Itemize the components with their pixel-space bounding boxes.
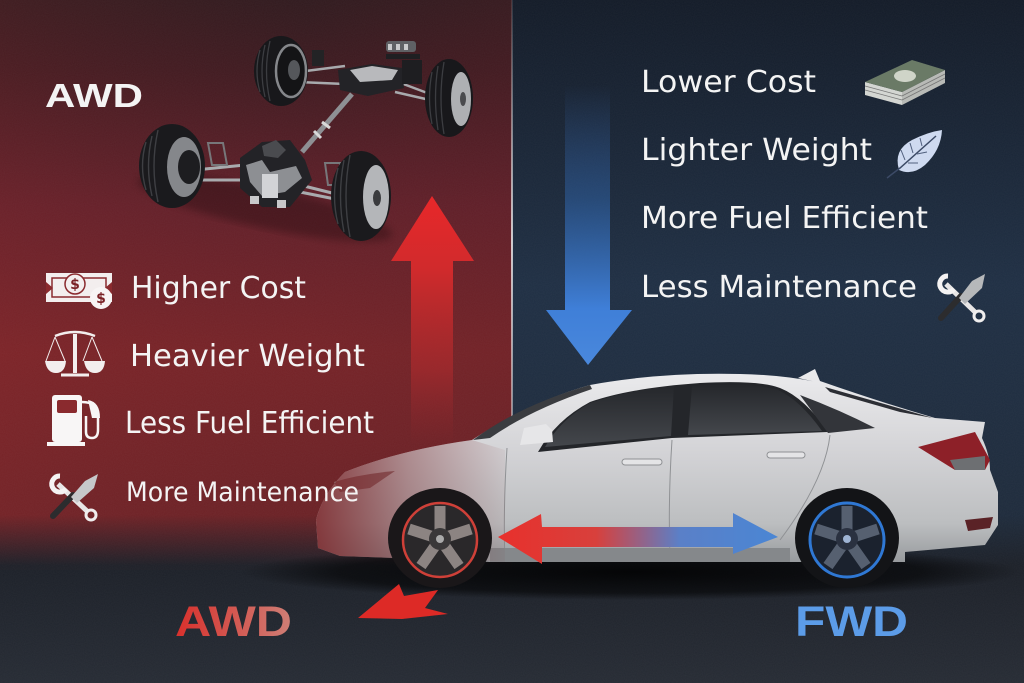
arrow: blue down bbox=[546, 85, 632, 365]
panel: AWD red background bbox=[0, 0, 512, 570]
panel: FWD navy background bbox=[512, 0, 1024, 570]
arrow: double red to blue bbox=[498, 513, 778, 564]
car body bbox=[316, 369, 998, 562]
list: AWD drawbacks bbox=[45, 271, 374, 520]
icon: tools bbox=[52, 474, 98, 520]
car door lines and handles bbox=[504, 435, 830, 562]
wheel: front right bbox=[331, 151, 391, 241]
drivetrain illustration bbox=[134, 36, 473, 255]
text: lower cost: Lower Cost bbox=[641, 65, 816, 100]
text: less maintenance: Less Maintenance bbox=[641, 270, 917, 305]
label: AWD: AWD bbox=[175, 598, 292, 646]
text: heavier weight: Heavier Weight bbox=[130, 339, 365, 374]
arrow: red up bbox=[391, 196, 474, 445]
car tail light bbox=[918, 432, 990, 470]
label: FWD: FWD bbox=[795, 598, 908, 646]
icon: feather bbox=[887, 130, 942, 178]
front axle parts bbox=[195, 140, 340, 208]
wheel: front red bbox=[388, 488, 492, 588]
wheel: rear blue bbox=[795, 488, 899, 588]
icon: money: $ bbox=[70, 277, 80, 293]
car mirror bbox=[520, 424, 553, 445]
wheel: rear right bbox=[425, 59, 473, 137]
wheel: rear left bbox=[254, 36, 308, 106]
icon: cash stack bbox=[865, 60, 945, 105]
text: higher cost: Higher Cost bbox=[131, 271, 306, 306]
icon: fuel pump bbox=[47, 395, 100, 446]
list: FWD benefits bbox=[641, 60, 985, 321]
icon: money bbox=[46, 273, 112, 309]
text: less fuel efficient: Less Fuel Efficient bbox=[125, 406, 374, 441]
rocker shade bbox=[490, 548, 790, 562]
icon: money: $ bbox=[96, 291, 106, 307]
panel: dark floor bbox=[0, 515, 1024, 683]
red tint over car front bbox=[316, 440, 505, 562]
wheel: front left bbox=[139, 124, 205, 208]
car headlight bbox=[334, 471, 395, 492]
text: more fuel efficient: More Fuel Efficient bbox=[641, 201, 928, 236]
icon: tools bbox=[940, 274, 985, 321]
rear axle parts bbox=[298, 41, 430, 100]
car windows bbox=[473, 382, 933, 452]
heading: AWD: AWD bbox=[45, 77, 143, 114]
text: lighter weight: Lighter Weight bbox=[641, 133, 872, 168]
icon: scale bbox=[45, 332, 105, 375]
car bbox=[240, 369, 1020, 600]
driveshaft bbox=[302, 94, 352, 152]
text: more maintenance: More Maintenance bbox=[126, 477, 359, 508]
arrow: small red ground bbox=[358, 584, 448, 619]
